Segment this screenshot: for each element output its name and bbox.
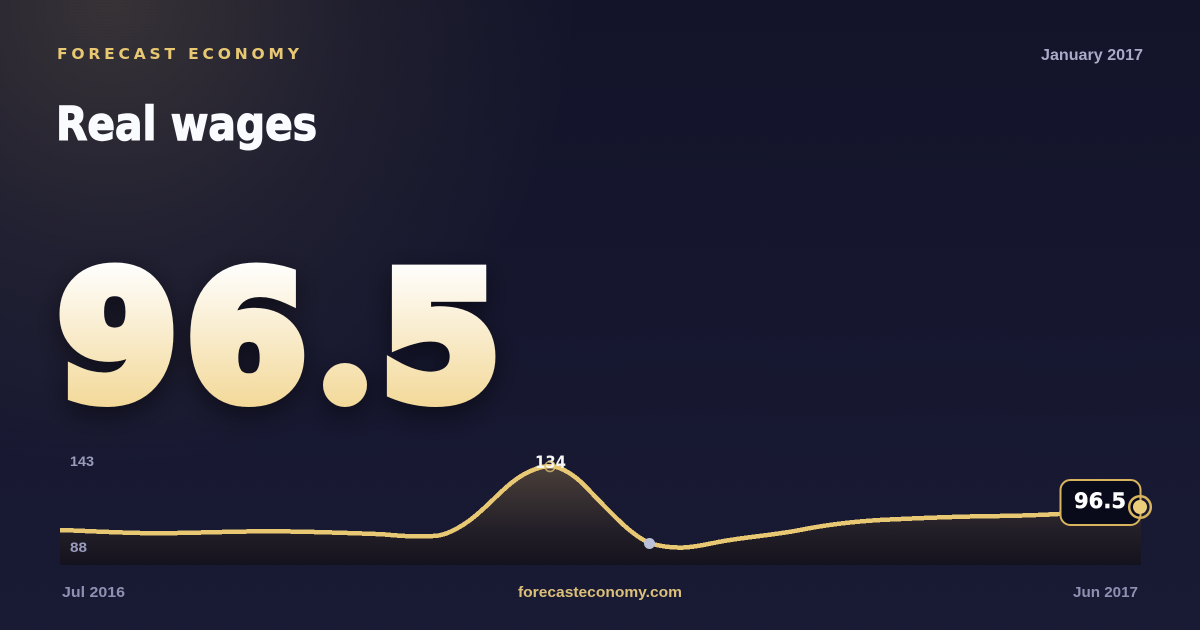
title: Real wages [56, 97, 317, 151]
peak value label and marker: 134 [535, 453, 566, 472]
big value: 9 [57, 237, 178, 440]
latest value callout: 96.5 [1074, 489, 1126, 513]
start date label: Jul 2016 [62, 584, 125, 601]
axis max label: 143 [70, 454, 95, 469]
brand kicker: FORECAST ECONOMY [57, 45, 300, 63]
latest point marker [1129, 496, 1151, 518]
low point marker [644, 538, 655, 549]
big value: 5 [380, 237, 501, 440]
big value [57, 237, 501, 440]
line chart [60, 453, 1151, 565]
chart area fill [60, 466, 1141, 565]
end date label: Jun 2017 [1073, 584, 1138, 601]
chart line [60, 466, 1140, 548]
axis min label: 88 [70, 540, 88, 555]
latest value callout [1060, 480, 1140, 525]
big value: 6 [186, 237, 307, 440]
website label: forecasteconomy.com [518, 584, 682, 601]
date: January 2017 [1041, 47, 1143, 64]
